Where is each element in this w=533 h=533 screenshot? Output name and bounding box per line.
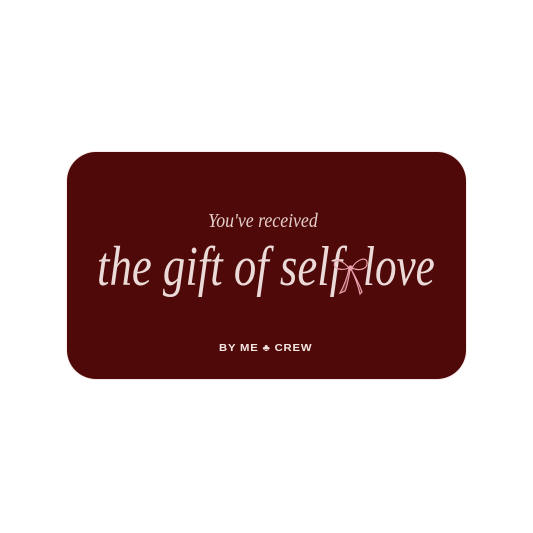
brand logo: BY ME & CREW: BY ME ♣ CREW [219,343,312,354]
gift card panel [67,152,466,379]
subheading: You've received: You've received [208,210,318,232]
icon: pink bow [334,258,368,296]
title: the gift of self love: the gift of self [97,236,342,298]
title: the gift of self love: love [363,236,435,298]
